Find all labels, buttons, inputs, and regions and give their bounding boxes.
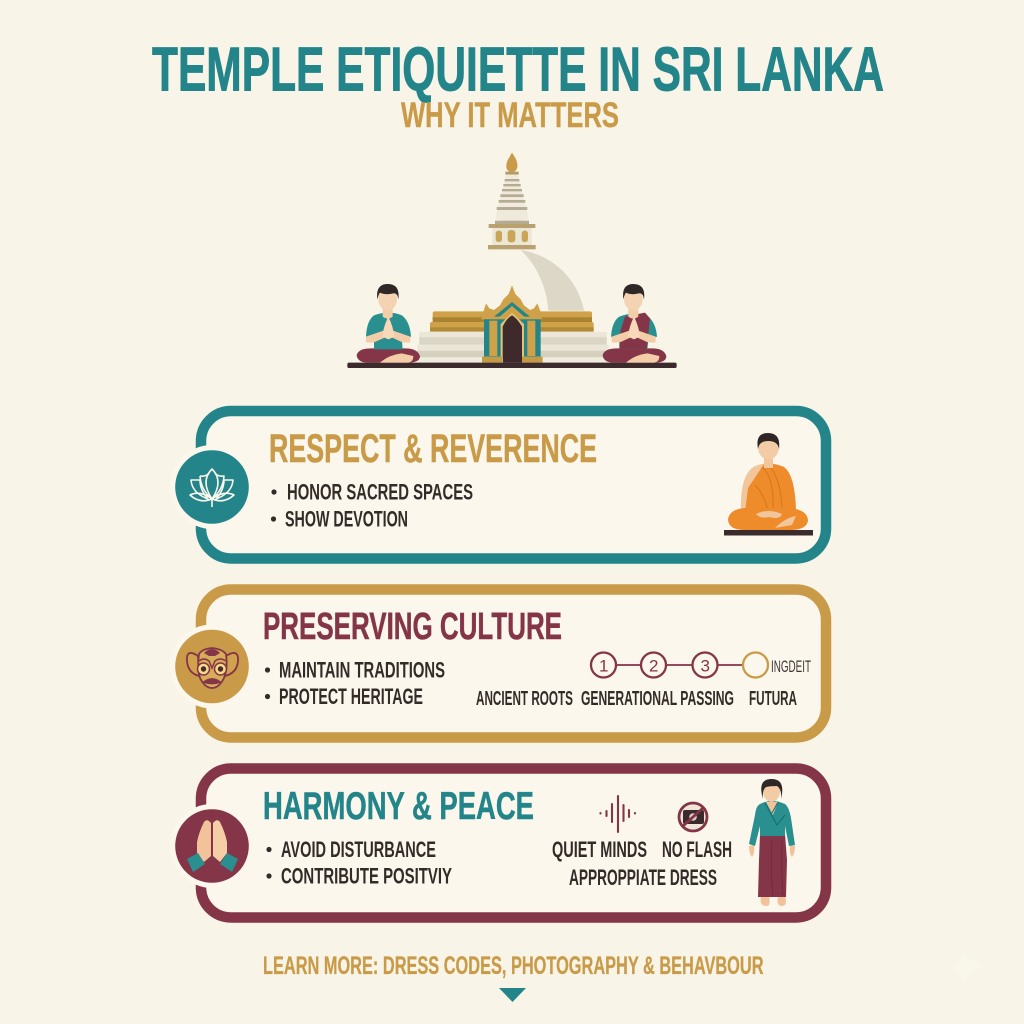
icon: praying hands badge xyxy=(170,804,254,888)
bullet list xyxy=(265,658,445,709)
icon: meditating monk xyxy=(724,433,813,536)
timeline labels: GENERATIONAL PASSING xyxy=(581,688,734,710)
timeline: INGDEIT xyxy=(771,657,811,676)
faint sparkle mark xyxy=(946,947,984,985)
panel border xyxy=(201,590,826,738)
seated devotee right xyxy=(603,284,666,363)
panel: preserving culture xyxy=(170,590,826,738)
icon: no flash camera xyxy=(679,803,707,831)
temple gate xyxy=(481,285,543,363)
bullet list: AVOID DISTURBANCE xyxy=(281,837,436,862)
footer call to action: LEARN MORE: DRESS CODES, PHOTOGRAPHY & BEHAVBOUR xyxy=(263,952,764,980)
white steps xyxy=(417,332,609,363)
stupa spire xyxy=(488,153,536,249)
bullet list: MAINTAIN TRADITIONS xyxy=(279,658,445,682)
icon: sound wave xyxy=(600,796,635,832)
icon labels: NO FLASH xyxy=(662,837,732,862)
heading: PRESERVING CULTURE xyxy=(263,606,562,648)
icon: lotus badge xyxy=(170,445,254,529)
panel border xyxy=(201,411,826,558)
bullet list: PROTECT HERITAGE xyxy=(279,684,423,709)
timeline labels: ANCIENT ROOTS xyxy=(476,688,573,710)
icon: woman in traditional dress xyxy=(749,779,795,906)
bullet list xyxy=(266,837,452,888)
panel: harmony and peace xyxy=(170,768,826,918)
timeline: 1 xyxy=(599,656,608,676)
timeline labels xyxy=(476,688,797,710)
icon labels: QUIET MINDS xyxy=(552,837,647,862)
timeline: 2 xyxy=(649,656,658,676)
heading: RESPECT & REVERENCE xyxy=(269,427,597,471)
gold platform xyxy=(430,311,594,332)
bullet list: HONOR SACRED SPACES xyxy=(287,480,473,504)
ground line xyxy=(347,363,677,368)
timeline xyxy=(591,652,811,678)
stupa dome shadow xyxy=(521,250,584,311)
heading: HARMONY & PEACE xyxy=(263,785,534,828)
icon labels xyxy=(552,837,732,890)
timeline labels: FUTURA xyxy=(749,688,797,710)
subtitle: WHY IT MATTERS xyxy=(401,96,619,135)
icon labels: APPROPPIATE DRESS xyxy=(569,865,717,890)
icon: mask badge xyxy=(170,624,254,708)
bullet list: SHOW DEVOTION xyxy=(285,506,408,532)
panel: respect and reverence xyxy=(170,411,826,558)
bullet list: CONTRIBUTE POSITVIY xyxy=(281,864,452,888)
seated devotee left xyxy=(357,284,420,363)
illustration: stupa temple with two seated devotees xyxy=(347,153,677,368)
arrow down xyxy=(499,988,526,1002)
timeline: 3 xyxy=(700,656,710,676)
panel border xyxy=(201,768,826,918)
bullet list xyxy=(271,480,473,532)
